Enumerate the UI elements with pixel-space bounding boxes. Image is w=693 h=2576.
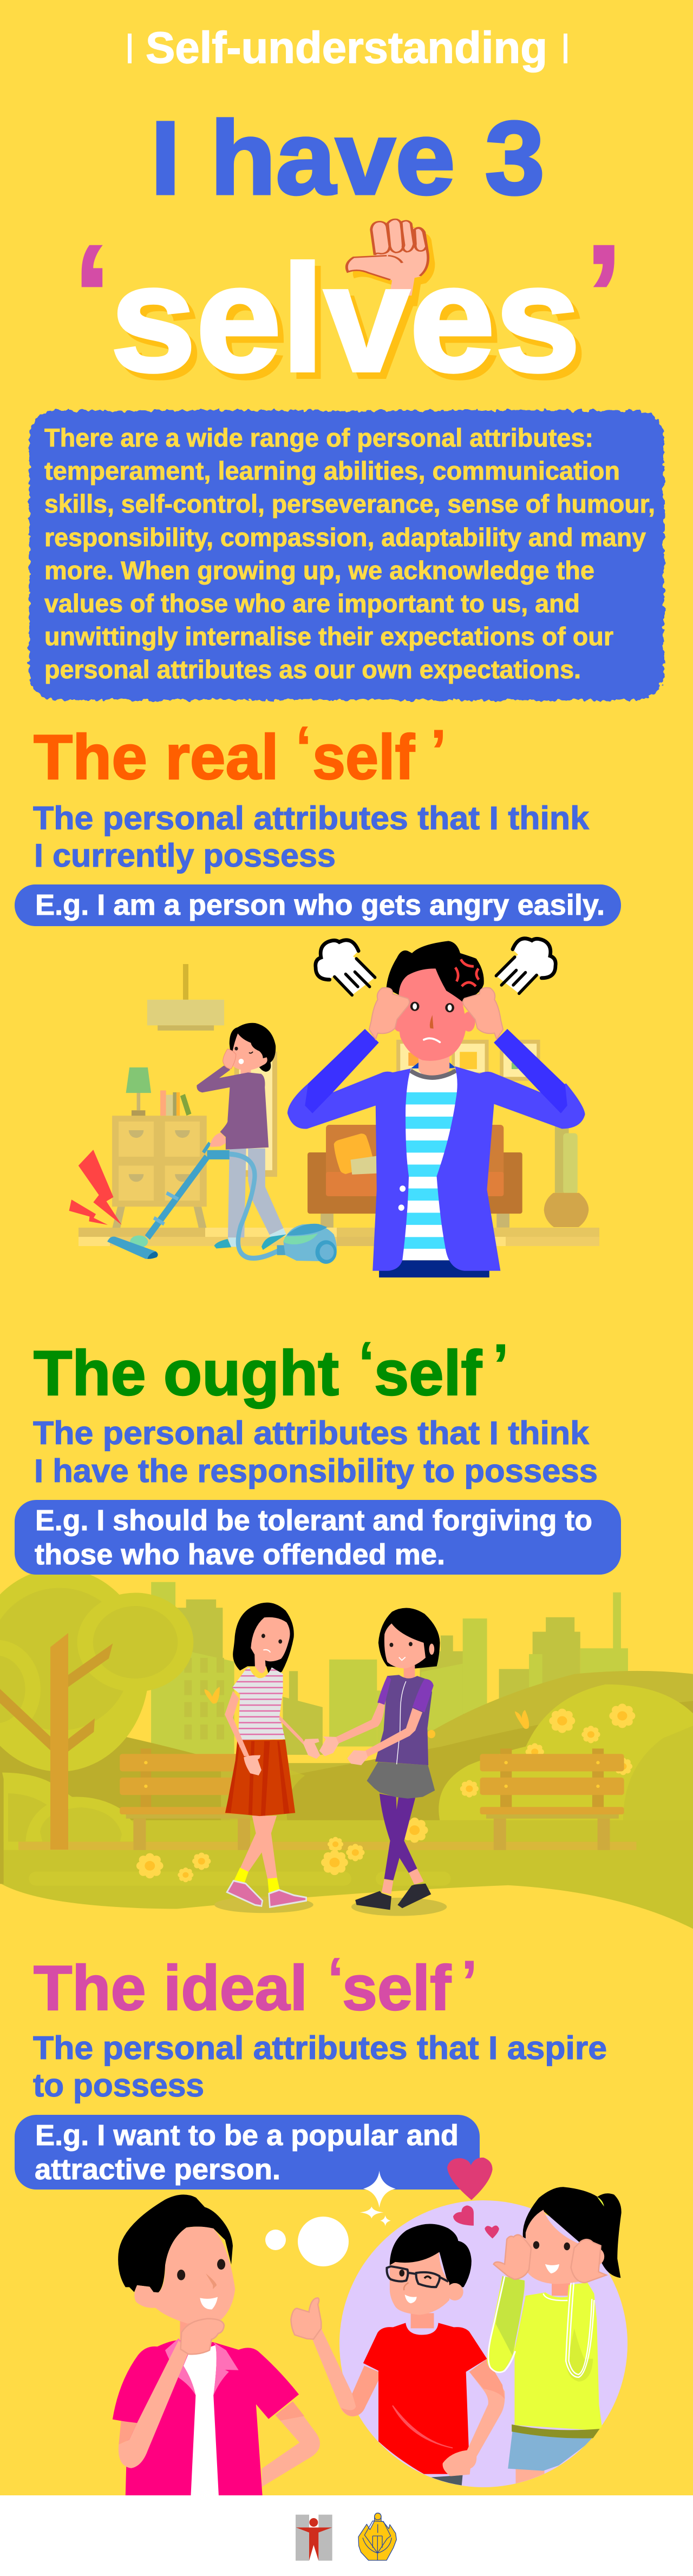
icon: sparkles <box>360 2171 396 2226</box>
footer band <box>0 2495 693 2576</box>
heading: the real self: ’ <box>430 717 447 786</box>
panel: intro: responsibility, compassion, adaptability and many <box>44 523 646 552</box>
icon: right steam puff <box>496 939 555 993</box>
right quotation mark: ’ <box>583 213 624 379</box>
panel: intro: temperament, learning abilities, communication <box>44 456 620 485</box>
text: ideal self definition <box>33 2030 607 2103</box>
example pill: ought self: E.g. I should be tolerant and forgiving to <box>35 1504 592 1537</box>
icon: pointing hand <box>346 219 435 306</box>
icon: hearts <box>447 2158 499 2238</box>
panel: intro: skills, self-control, perseverance, sense of humour, <box>44 489 655 518</box>
thought circle <box>339 2200 627 2487</box>
panel: intro: unwittingly internalise their expectations of our <box>44 622 613 651</box>
panel: intro: There are a wide range of personal attributes: <box>44 423 593 452</box>
heading: the ought self: The ought <box>34 1338 339 1408</box>
title line: I have 3: I have 3 <box>151 100 545 216</box>
heading: the ideal self <box>34 1945 478 2023</box>
illustration: living room floor <box>79 1228 599 1246</box>
heading: the real self: self <box>312 722 415 792</box>
big word: selves with shadow: selves <box>110 234 580 403</box>
logo: social welfare department <box>296 2515 332 2561</box>
text: ought self definition: The personal attributes that I think <box>33 1415 590 1451</box>
illustration: sofa, frames and plant <box>308 1040 589 1228</box>
heading: the ought self: ‘ <box>358 1329 375 1398</box>
illustration: flowers and butterflies <box>136 1687 635 1882</box>
text: real self definition <box>33 800 590 874</box>
left quotation mark: ‘ <box>71 213 113 379</box>
figure: thinking boy <box>113 2194 320 2495</box>
figure: angry man <box>287 941 585 1277</box>
icon: lightning bolts <box>69 1150 122 1225</box>
text: real self definition: I currently possess <box>34 837 336 874</box>
icon: left steam puff <box>316 940 375 995</box>
heading: the real self: ‘ <box>295 714 312 783</box>
text: ought self definition: I have the responsibility to possess <box>34 1453 598 1489</box>
illustration: big tree <box>0 1569 193 1884</box>
figure: girl with ponytail <box>487 2187 622 2485</box>
panel: intro: more. When growing up, we acknowledge the <box>44 556 594 585</box>
text: ideal self definition: The personal attributes that I aspire <box>33 2030 607 2066</box>
big word: selves with shadow: selves <box>116 241 586 410</box>
heading: the ought self: ’ <box>492 1332 509 1400</box>
heading: the ideal self: The ideal <box>34 1952 308 2023</box>
example pill: ought self: those who have offended me. <box>35 1538 445 1571</box>
example pill: ideal self: E.g. I want to be a popular and <box>35 2119 459 2152</box>
heading: the ought self: self <box>374 1338 482 1408</box>
heading: the ideal self: ‘ <box>327 1945 344 2014</box>
figure: girl with long hair <box>225 1603 320 1907</box>
logo: hands holding figure <box>358 2513 396 2560</box>
figure: boy with red shirt <box>291 2224 505 2487</box>
illustration: park background <box>0 1582 693 1929</box>
panel: intro: personal attributes as our own expectations. <box>44 655 581 684</box>
panel: intro <box>29 410 664 700</box>
text: real self definition: The personal attributes that I think <box>33 800 590 836</box>
figure: woman vacuuming <box>107 1023 337 1264</box>
heading: the ideal self: self <box>342 1952 452 2023</box>
example pill: ideal self: attractive person. <box>35 2153 280 2186</box>
heading: the real self: The real <box>34 722 279 792</box>
example pill: ought self <box>15 1500 621 1575</box>
example pill: real self: E.g. I am a person who gets angry easily. <box>35 889 605 921</box>
figure: girl with short hair <box>319 1608 440 1910</box>
heading: the real self <box>34 714 447 792</box>
heading: the ought self <box>34 1329 509 1408</box>
header label: Self-understanding <box>146 23 547 73</box>
heading: the ideal self: ’ <box>461 1948 478 2017</box>
thought bubbles <box>265 2217 349 2266</box>
panel: intro: values of those who are important to us, and <box>44 589 580 618</box>
illustration: room furniture left <box>112 964 277 1228</box>
illustration: park benches <box>120 1748 624 1916</box>
text: ideal self definition: to possess <box>33 2067 204 2103</box>
example pill: ideal self <box>15 2115 480 2190</box>
text: ought self definition <box>33 1415 598 1489</box>
